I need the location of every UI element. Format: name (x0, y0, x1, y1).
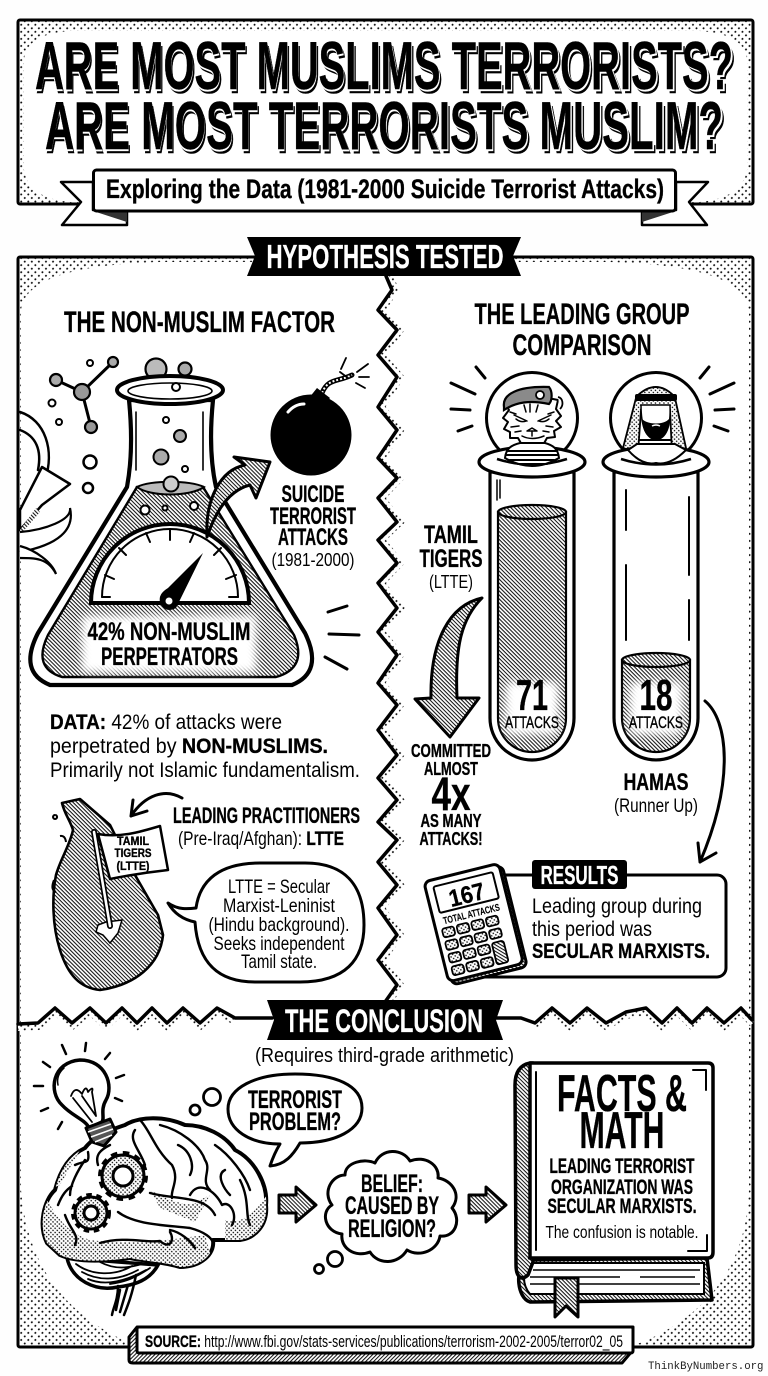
label: tamil tigers: (LTTE) (429, 572, 473, 592)
flask bubbles (140, 383, 198, 514)
callout: ltte speech bubble (168, 863, 364, 982)
gear large (100, 1153, 146, 1199)
subtitle ribbon (61, 170, 708, 225)
callout: ltte speech bubble: LTTE = Secular (228, 876, 330, 898)
thought bubble: terrorist problem (190, 1074, 362, 1166)
flask rim (117, 376, 223, 404)
results label: RESULTS (540, 860, 618, 890)
label: suicide terrorist attacks: ATTACKS (278, 524, 348, 551)
text: leading practitioners: LEADING PRACTITIONERS (173, 803, 360, 828)
label: suicide terrorist attacks: TERRORIST (270, 503, 356, 530)
gauge label: PERPETRATORS (101, 643, 238, 671)
thought cloud: belief (314, 1151, 457, 1274)
book title: MATH (580, 1102, 664, 1160)
icon: calculator (424, 863, 527, 986)
results text: SECULAR MARXISTS. (532, 939, 710, 963)
heading: the non-muslim factor: THE NON-MUSLIM FACTOR (64, 306, 335, 339)
bookmark (555, 1278, 578, 1317)
callout: committed almost 4x: ALMOST (424, 759, 478, 779)
redraw portrait bottom over rim: hamas robe (628, 444, 686, 463)
horizontal zigzag divider (18, 1008, 752, 1028)
label: tamil tigers (420, 521, 482, 592)
thought cloud: belief: BELIEF: (361, 1170, 423, 1198)
banner: the conclusion (267, 1000, 503, 1040)
callout: committed almost 4x: COMMITTED (411, 741, 491, 761)
brain stem (112, 1275, 136, 1315)
label: suicide terrorist attacks: (1981-2000) (272, 550, 354, 570)
results text: this period was (532, 917, 652, 941)
thought bubble: terrorist problem: PROBLEM? (249, 1108, 341, 1136)
text: data block: perpetrated by NON-MUSLIMS. (50, 734, 328, 758)
label: hamas (614, 769, 698, 817)
label: tamil tigers: TIGERS (420, 545, 482, 573)
thought bubble: terrorist problem: TERRORIST (248, 1086, 342, 1114)
gauge label (82, 616, 256, 672)
icon: molecule and bubbles (48, 357, 192, 493)
callout: ltte speech bubble: Seeks independent (214, 933, 345, 955)
vertical zigzag divider (378, 276, 401, 1002)
text: data block (50, 710, 360, 782)
icon: calculator: 167 (446, 878, 488, 913)
icon: calculator: TOTAL ATTACKS (442, 902, 501, 927)
icon: brain with gears (40, 1118, 270, 1315)
book text: SECULAR MARXISTS. (548, 1195, 696, 1218)
book cover (530, 1063, 713, 1258)
text: leading practitioners: (Pre-Iraq/Afghan): LTTE (178, 828, 344, 850)
liquid 71 (498, 512, 566, 752)
icon: sri lanka map with flag (52, 799, 168, 990)
callout: committed almost 4x (411, 741, 491, 849)
book pages (519, 1258, 712, 1302)
flask body (30, 400, 312, 685)
flag pole (94, 832, 110, 926)
arrow: brain to belief (279, 1187, 316, 1222)
test tube: tamil tigers (479, 447, 585, 760)
flag (98, 826, 168, 879)
icon: tiger portrait (485, 371, 579, 450)
book text: ORGANIZATION WAS (551, 1176, 693, 1199)
arrow: curved down (415, 598, 482, 737)
heading: the leading group comparison (474, 298, 690, 362)
text: data block: Primarily not Islamic fundamentalism. (50, 758, 360, 782)
results label (532, 860, 627, 890)
icon: hamas figure portrait (609, 371, 703, 450)
icon: flask with gauge (30, 376, 312, 685)
arrow: flask to bomb (207, 457, 270, 537)
callout: committed almost 4x: 4x (432, 767, 470, 820)
value 18: 18 (640, 671, 672, 720)
book text: LEADING TERRORIST (550, 1155, 695, 1178)
banner: hypothesis tested: HYPOTHESIS TESTED (266, 238, 504, 275)
label: hamas: HAMAS (624, 769, 688, 796)
title panel (18, 20, 753, 204)
results box (470, 860, 726, 977)
liquid 18 (622, 660, 690, 752)
book text (546, 1155, 698, 1242)
gauge (91, 524, 249, 603)
credit: ThinkByNumbers.org (648, 1361, 763, 1373)
redraw portrait bottom over rim: tiger shirt (505, 443, 559, 466)
cerebellum (67, 1258, 158, 1288)
callout: committed almost 4x: ATTACKS! (420, 829, 482, 849)
label: suicide terrorist attacks: SUICIDE (282, 481, 344, 508)
flag text: TAMIL (117, 834, 149, 848)
main panel frame (18, 257, 753, 1347)
banner: the conclusion: THE CONCLUSION (285, 1003, 483, 1039)
results text (532, 894, 710, 963)
flag text: (LTTE) (116, 859, 150, 873)
gauge label: 42% NON-MUSLIM (88, 618, 250, 646)
value 18: ATTACKS (629, 713, 683, 732)
label: hamas: (Runner Up) (614, 796, 698, 817)
results text: Leading group during (532, 894, 702, 918)
cerebrum (43, 1118, 266, 1267)
thought cloud: belief: RELIGION? (348, 1215, 436, 1243)
emphasis marks beside flask (325, 606, 359, 669)
gear small (73, 1195, 109, 1231)
arrow: belief to book (469, 1187, 506, 1222)
value 71: 71 (516, 671, 548, 720)
book spine (515, 1063, 533, 1278)
icon: facts and math book (515, 1063, 713, 1317)
emphasis marks around portraits (451, 367, 734, 431)
arrow: hamas to results (698, 701, 724, 862)
icon: bomb (270, 358, 369, 476)
callout: committed almost 4x: AS MANY (420, 811, 482, 831)
subtitle: requires third-grade arithmetic: (Requires third-grade arithmetic) (255, 1045, 514, 1067)
value 71: ATTACKS (505, 713, 559, 732)
tube rim (603, 447, 709, 477)
icon: background flask ornament at edge (20, 412, 71, 574)
callout: ltte speech bubble: Tamil state. (241, 951, 317, 973)
value 18 (629, 671, 683, 732)
thought cloud: belief: CAUSED BY (345, 1192, 439, 1220)
label: suicide terrorist attacks (270, 481, 356, 570)
banner: hypothesis tested (247, 237, 521, 276)
source bar (129, 1327, 633, 1363)
arrow: to sri lanka (131, 794, 182, 816)
label: tamil tigers: TAMIL (424, 521, 478, 549)
callout: ltte speech bubble: (Hindu background). (208, 914, 350, 936)
gauge needle (160, 553, 203, 610)
value 71 (505, 671, 559, 732)
tube rim (479, 447, 585, 477)
icon: light bulb (34, 1043, 124, 1146)
text: data block: DATA: 42% of attacks were (50, 710, 282, 734)
flag text: TIGERS (114, 846, 152, 860)
heading: the leading group comparison: COMPARISON (512, 329, 652, 362)
test tube: hamas (603, 447, 709, 760)
book text: The confusion is notable. (546, 1222, 698, 1242)
text: leading practitioners (173, 803, 360, 850)
flag text (114, 834, 152, 873)
callout: ltte speech bubble: Marxist-Leninist (223, 895, 335, 917)
book title (557, 1065, 687, 1160)
